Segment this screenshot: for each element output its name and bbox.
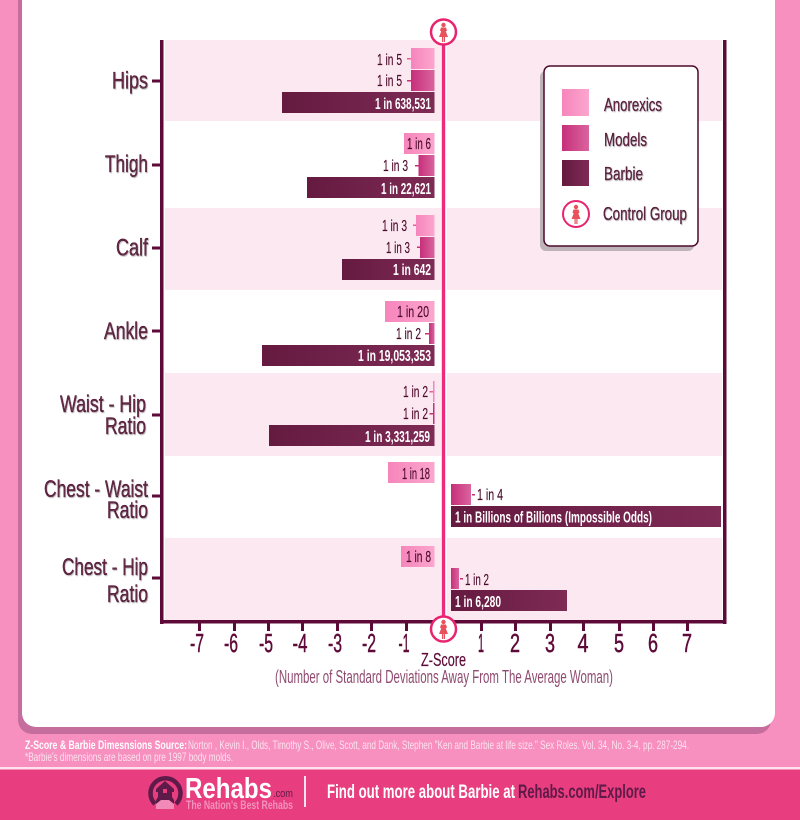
row: chest-hip ratio: 1 in 8 bbox=[406, 549, 431, 566]
row: chest-waist ratio: 1 in 4 bbox=[477, 487, 503, 504]
control group line bbox=[442, 40, 445, 620]
row: chest-hip ratio: Ratio bbox=[107, 581, 148, 608]
row: calf bbox=[116, 215, 434, 280]
row bands bbox=[165, 40, 722, 620]
row: waist-hip ratio: Waist - Hip bbox=[60, 391, 146, 418]
row: ankle: 1 in 20 bbox=[397, 304, 429, 321]
source note: *Barbie's dimensions are based on pre 1997 body molds. bbox=[25, 750, 233, 764]
row: thigh: 1 in 3 bbox=[383, 158, 408, 175]
row: hips: 1 in 638,531 bbox=[375, 96, 431, 113]
axis tick labels: -5 bbox=[259, 628, 273, 658]
logo icon bbox=[151, 778, 180, 809]
footer divider bbox=[304, 776, 306, 807]
row: hips bbox=[112, 48, 434, 113]
axis tick labels: 1 bbox=[478, 628, 484, 658]
row: chest-waist ratio: Ratio bbox=[107, 497, 148, 524]
row: ankle: 1 in 2 bbox=[396, 326, 421, 343]
icon: bottom control group marker bbox=[431, 616, 456, 642]
row: calf: Calf bbox=[116, 234, 148, 262]
logo wordmark: Rehabs bbox=[185, 773, 272, 805]
row: chest-hip ratio: 1 in 6,280 bbox=[455, 594, 501, 611]
axis tick labels: 4 bbox=[578, 628, 588, 658]
row: chest-waist ratio bbox=[44, 462, 721, 527]
axis tick labels: -3 bbox=[328, 628, 342, 658]
row: thigh: 1 in 6 bbox=[407, 136, 431, 153]
legend: Models bbox=[604, 130, 647, 150]
row: hips: Hips bbox=[112, 68, 148, 94]
row: waist-hip ratio: 1 in 2 bbox=[403, 406, 428, 423]
legend: Anorexics bbox=[604, 95, 662, 115]
axis tick labels bbox=[190, 628, 692, 658]
row: ankle bbox=[104, 301, 434, 366]
legend bbox=[540, 66, 698, 251]
row: waist-hip ratio: 1 in 2 bbox=[403, 384, 428, 401]
row: thigh: 1 in 22,621 bbox=[381, 181, 431, 198]
axis title: Z-Score bbox=[421, 650, 466, 670]
chart axes bbox=[152, 40, 726, 631]
legend: Control Group bbox=[603, 204, 687, 224]
footer call to action: Rehabs.com/Explore bbox=[518, 782, 646, 803]
row: thigh bbox=[105, 133, 434, 198]
axis tick labels: -6 bbox=[224, 628, 238, 658]
row: chest-waist ratio: 1 in 18 bbox=[402, 466, 430, 483]
axis tick labels: 6 bbox=[648, 628, 658, 658]
row: chest-waist ratio: 1 in Billions of Billions (Impossible Odds) bbox=[455, 510, 652, 526]
axis tick labels: -2 bbox=[362, 628, 376, 658]
logo wordmark: .com bbox=[273, 788, 293, 800]
axis tick labels: 7 bbox=[682, 628, 692, 658]
axis tick labels: 2 bbox=[510, 628, 520, 658]
source note: Z-Score & Barbie Dimesnsions Source: bbox=[25, 738, 187, 752]
row: waist-hip ratio bbox=[60, 381, 434, 446]
row: ankle: 1 in 19,053,353 bbox=[358, 348, 431, 365]
row: waist-hip ratio: Ratio bbox=[105, 413, 146, 440]
axis tick labels: -4 bbox=[292, 628, 308, 658]
row: chest-hip ratio: 1 in 2 bbox=[465, 572, 489, 589]
row: hips: 1 in 5 bbox=[377, 52, 402, 69]
icon: top control group marker bbox=[431, 20, 456, 44]
axis tick labels: -1 bbox=[398, 628, 410, 658]
footer bar bbox=[0, 767, 800, 820]
row: hips: 1 in 5 bbox=[377, 73, 402, 90]
axis tick labels: -7 bbox=[190, 628, 204, 658]
row: calf: 1 in 642 bbox=[393, 262, 431, 279]
footer call to action: Find out more about Barbie at bbox=[327, 782, 515, 803]
axis tick labels: 5 bbox=[614, 628, 624, 658]
row: thigh: Thigh bbox=[105, 151, 148, 178]
row: calf: 1 in 3 bbox=[386, 240, 410, 257]
row: chest-hip ratio bbox=[62, 546, 567, 611]
legend: Barbie bbox=[604, 164, 643, 184]
row: ankle: Ankle bbox=[104, 318, 148, 345]
axis subtitle: (Number of Standard Deviations Away From The Average Woman) bbox=[275, 667, 613, 687]
row: chest-hip ratio: Chest - Hip bbox=[62, 554, 148, 581]
logo wordmark: The Nation's Best Rehabs bbox=[186, 798, 293, 812]
row: calf: 1 in 3 bbox=[382, 218, 407, 235]
row: chest-waist ratio: Chest - Waist bbox=[44, 476, 148, 503]
source note bbox=[25, 738, 689, 764]
axis tick labels: 3 bbox=[545, 628, 555, 658]
row: waist-hip ratio: 1 in 3,331,259 bbox=[365, 429, 430, 446]
